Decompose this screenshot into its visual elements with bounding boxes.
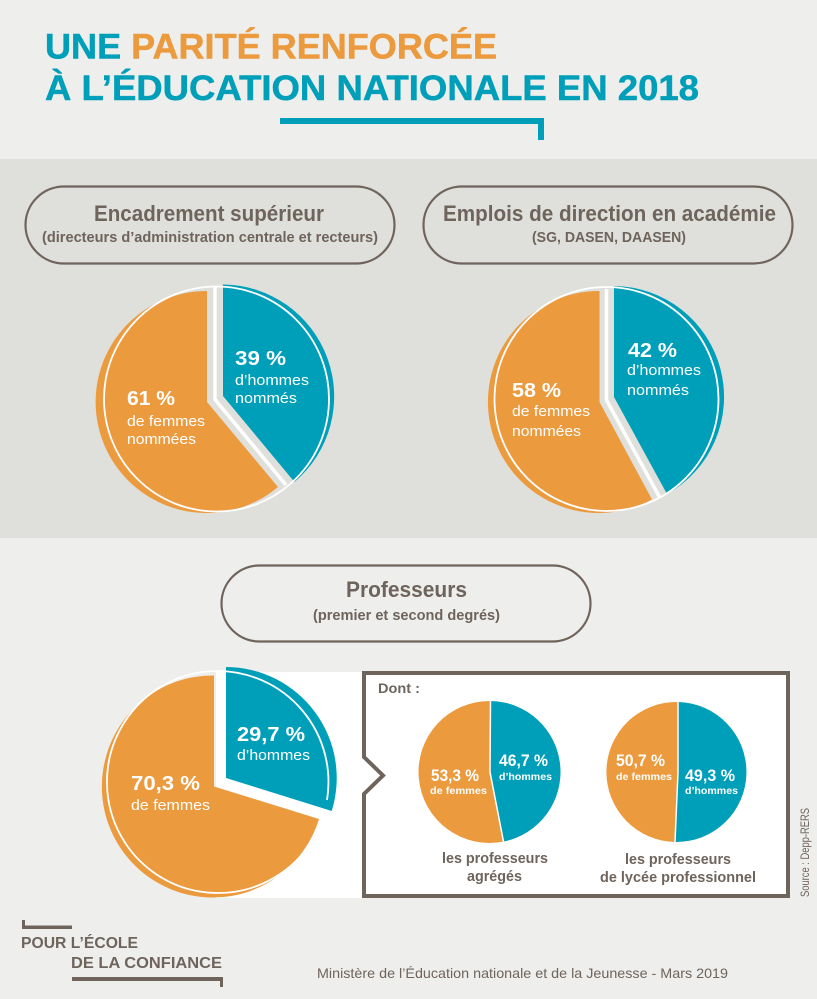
pie chart: professeurs: d’hommes [237, 747, 310, 764]
panel: emplois de direction heading: (SG, DASEN, DAASEN) [532, 229, 686, 246]
pie chart: professeurs: de femmes [131, 797, 210, 814]
caption: professeurs agrégés: agrégés [467, 868, 522, 885]
pie chart: professeurs agrégés: de femmes [430, 785, 487, 797]
logo: pour l'école de la confiance: POUR L’ÉCOLE [21, 935, 138, 952]
title bracket rule [280, 118, 544, 140]
pie chart: encadrement supérieur [96, 284, 334, 513]
pie chart: professeurs de lycée professionnel: d’hommes [685, 785, 738, 797]
pie chart: encadrement supérieur: d’hommes [235, 372, 309, 389]
pie chart: encadrement supérieur: nommées [127, 431, 196, 448]
pie chart: encadrement supérieur: 39 % [235, 348, 286, 370]
source note: Source : Depp-RERS [800, 808, 812, 897]
panel: emplois de direction heading [424, 186, 792, 264]
logo: pour l'école de la confiance [21, 920, 223, 987]
panel: professeurs heading: Professeurs [346, 577, 467, 602]
panel: dont callout box: Dont : [378, 680, 420, 696]
title: À L’ÉDUCATION NATIONALE EN 2018 [45, 68, 699, 108]
footer credit: Ministère de l’Éducation nationale et de la Jeunesse - Mars 2019 [317, 965, 728, 981]
pie chart: professeurs [102, 667, 337, 897]
logo: pour l'école de la confiance: DE LA CONFIANCE [71, 955, 222, 972]
pie chart: emplois de direction: nommées [512, 423, 581, 440]
pie chart: encadrement supérieur: 61 % [127, 388, 175, 410]
panel: professeurs heading: (premier et second degrés) [313, 607, 500, 624]
pie chart: emplois de direction: nommés [627, 382, 689, 399]
pie chart: professeurs: 70,3 % [131, 773, 200, 795]
pie chart: emplois de direction [488, 286, 724, 513]
pie chart: encadrement supérieur: de femmes [127, 413, 205, 430]
caption: professeurs de lycée professionnel [600, 851, 756, 886]
pie chart: professeurs agrégés [419, 701, 561, 843]
pie chart: professeurs agrégés: 46,7 % [499, 751, 548, 770]
caption: professeurs agrégés: les professeurs [442, 850, 548, 867]
panel: dont callout box [364, 673, 788, 896]
pie chart: emplois de direction: 42 % [628, 340, 677, 362]
pie chart: emplois de direction: 58 % [512, 380, 561, 402]
pie chart: professeurs de lycée professionnel: 49,3 % [685, 766, 735, 785]
panel: emplois de direction heading: Emplois de direction en académie [443, 201, 776, 226]
pie chart: professeurs de lycée professionnel [606, 702, 746, 842]
caption: professeurs de lycée professionnel: de lycée professionnel [600, 869, 756, 886]
title: UNE PARITÉ RENFORCÉE [45, 26, 497, 66]
pie chart: professeurs: 29,7 % [237, 724, 305, 746]
caption: professeurs agrégés [442, 850, 548, 885]
pie chart: emplois de direction: de femmes [512, 403, 590, 420]
pie chart: professeurs agrégés: d’hommes [499, 771, 552, 783]
pie chart: professeurs agrégés: 53,3 % [431, 766, 479, 785]
panel: encadrement supérieur heading: Encadrement supérieur [94, 201, 324, 226]
pie chart: encadrement supérieur: nommés [235, 390, 297, 407]
panel: professeurs heading [222, 566, 590, 642]
pie chart: emplois de direction: d’hommes [627, 362, 701, 379]
panel: encadrement supérieur heading [26, 186, 394, 264]
pie chart: professeurs de lycée professionnel: 50,7 % [616, 751, 665, 770]
title [45, 26, 699, 108]
pie chart: professeurs de lycée professionnel: de femmes [616, 771, 672, 783]
panel: encadrement supérieur heading: (directeurs d’administration centrale et recteurs) [42, 229, 378, 246]
white backdrop behind professeurs pie [216, 672, 388, 898]
caption: professeurs de lycée professionnel: les professeurs [625, 851, 731, 868]
